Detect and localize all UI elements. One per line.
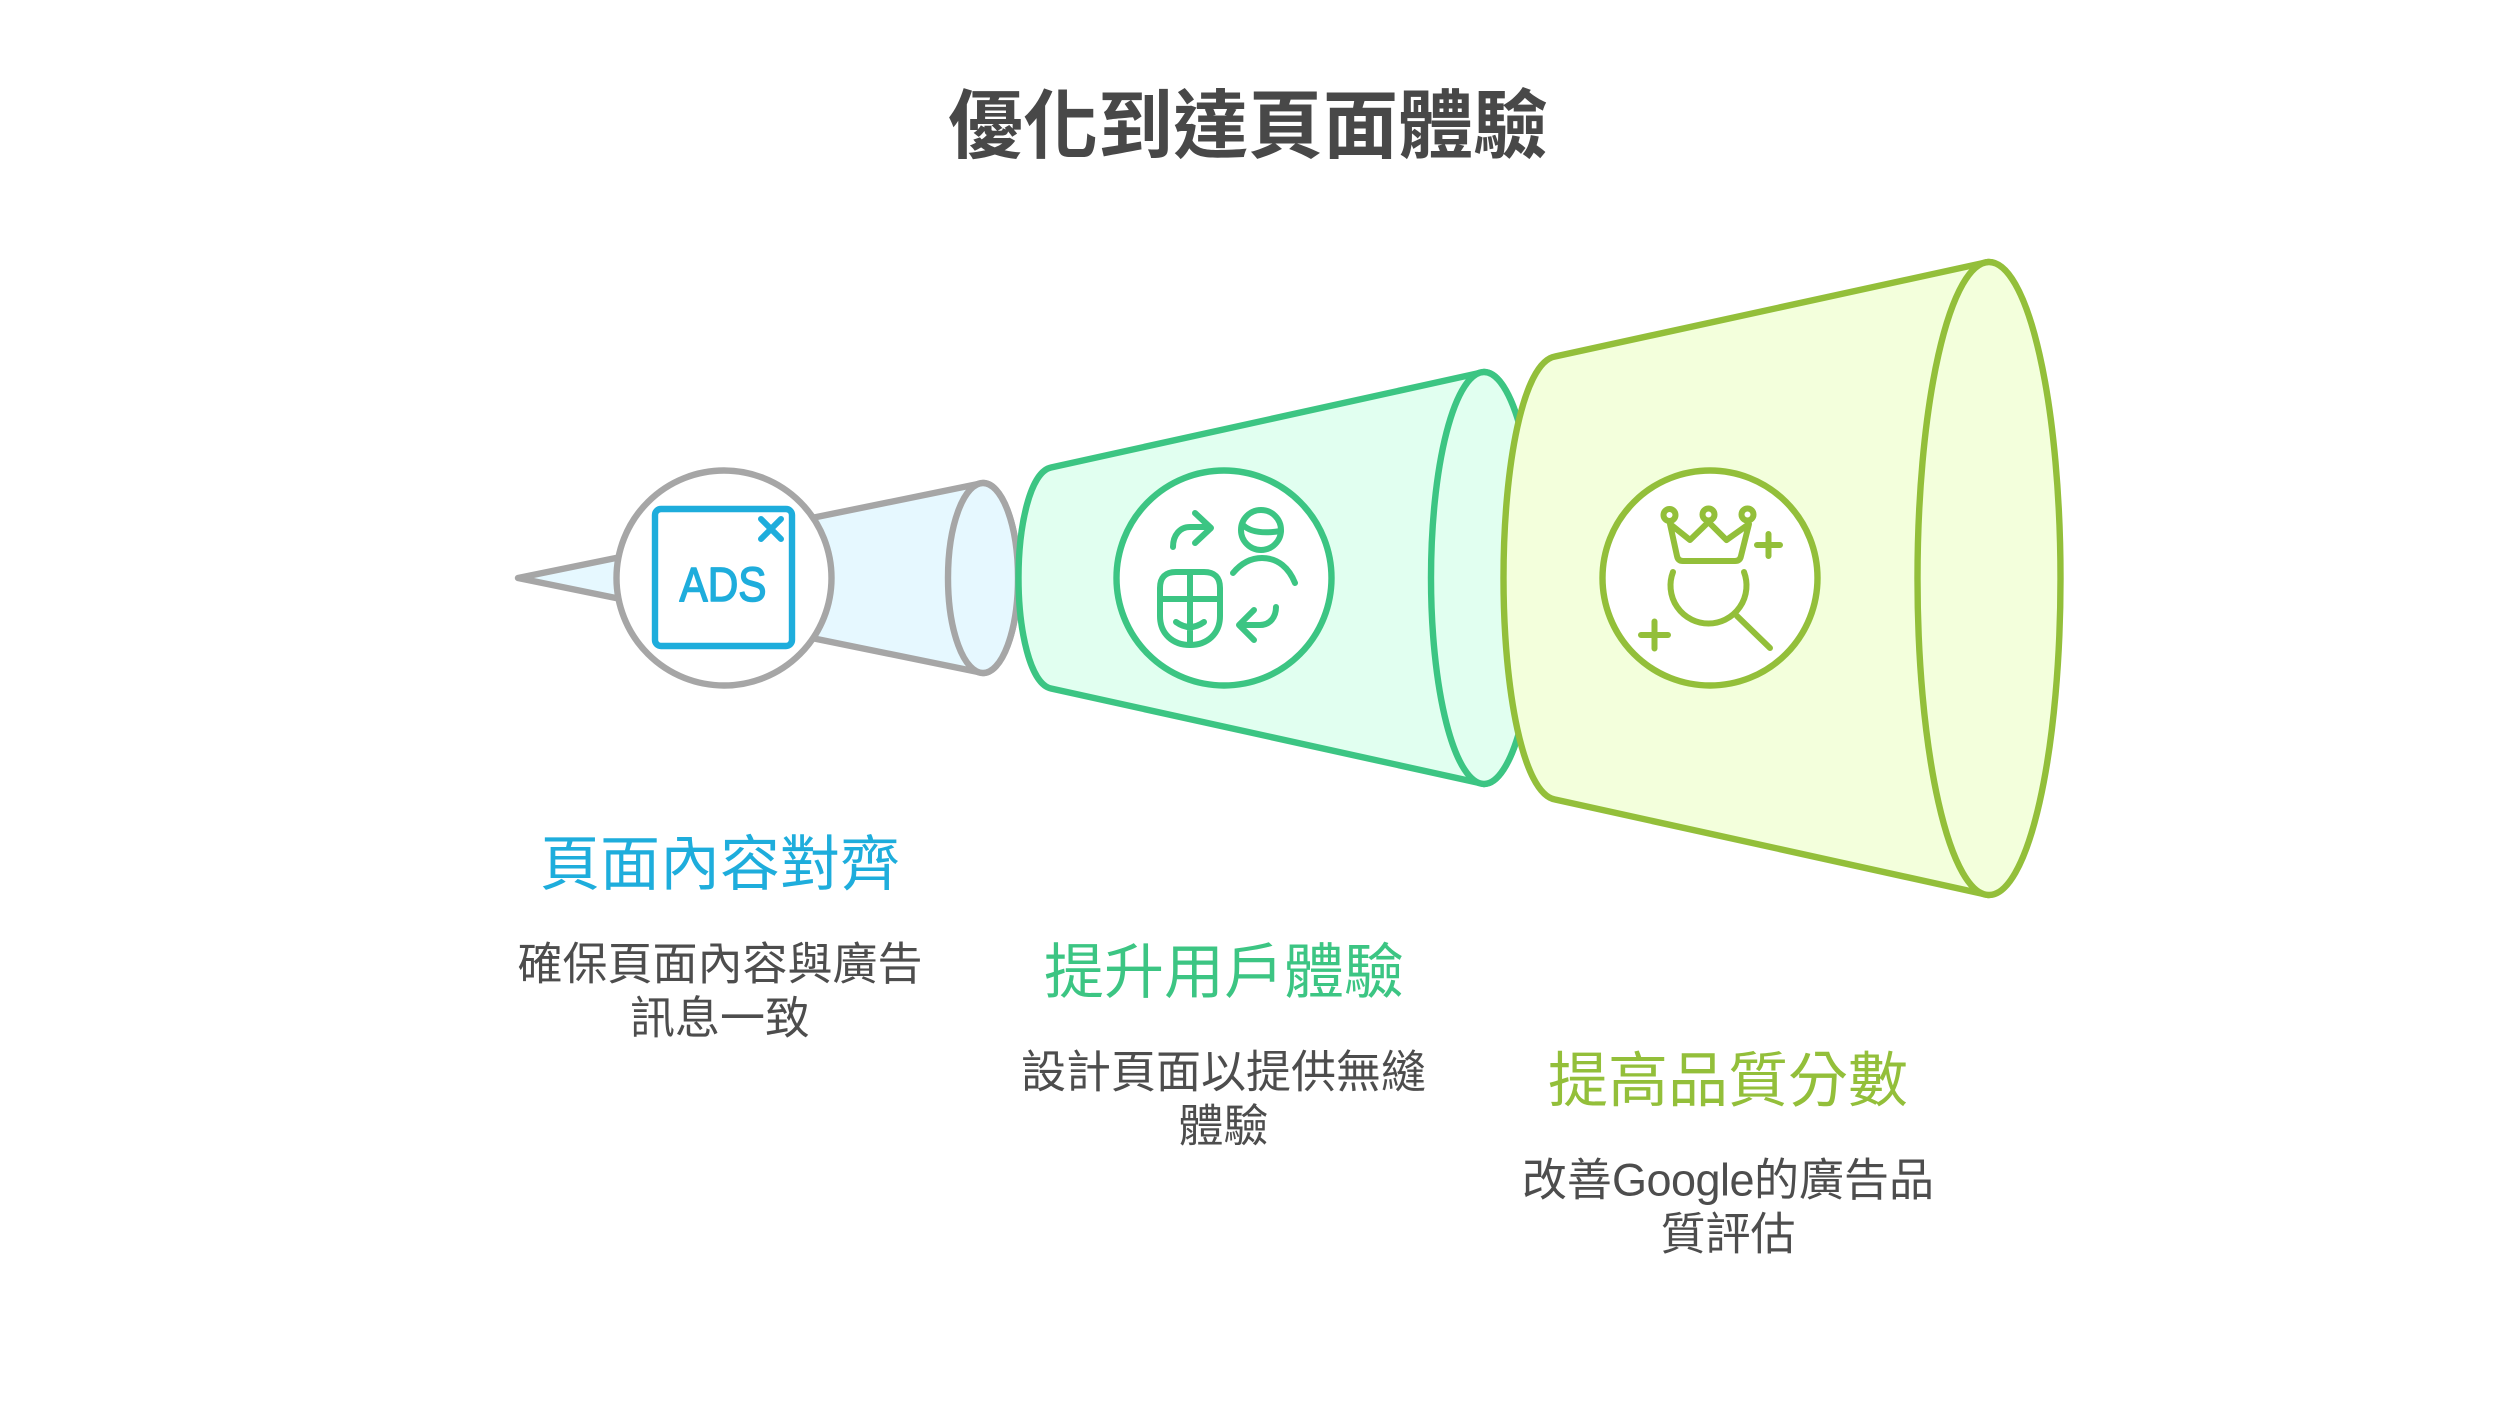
heading: user experience: 提升用戶體驗 xyxy=(1044,939,1404,1006)
description: user experience: 體驗 xyxy=(1178,1100,1269,1152)
funnel stage: quality score cone xyxy=(1504,262,2060,895)
icon: user and mouse experience xyxy=(1116,470,1332,686)
icon: ads window xyxy=(616,470,832,686)
description: quality score: 改善Google的廣告品 xyxy=(1522,1154,1934,1206)
icon: crown and magnifier xyxy=(1602,470,1818,686)
step 2 text xyxy=(1021,939,1426,1152)
description: page content alignment: 訊息一致 xyxy=(630,992,810,1044)
step 1 text xyxy=(517,831,923,1044)
icon: ads window: ADS xyxy=(680,559,766,612)
step 3 text xyxy=(1522,1048,1934,1260)
funnel stage: page content alignment cone xyxy=(518,483,1018,673)
description: user experience: 設計頁面以提供無縫 xyxy=(1021,1046,1426,1098)
funnel diagram xyxy=(518,262,2060,895)
description: page content alignment: 確保頁面內容與廣告 xyxy=(517,938,923,990)
funnel stage: user experience cone xyxy=(1018,372,1537,784)
title: 優化到達頁面體驗 xyxy=(948,84,1548,168)
heading: quality score: 提高品質分數 xyxy=(1548,1048,1908,1114)
description: quality score: 質評估 xyxy=(1660,1208,1796,1260)
heading: page content alignment: 頁面內容對齊 xyxy=(540,831,900,898)
